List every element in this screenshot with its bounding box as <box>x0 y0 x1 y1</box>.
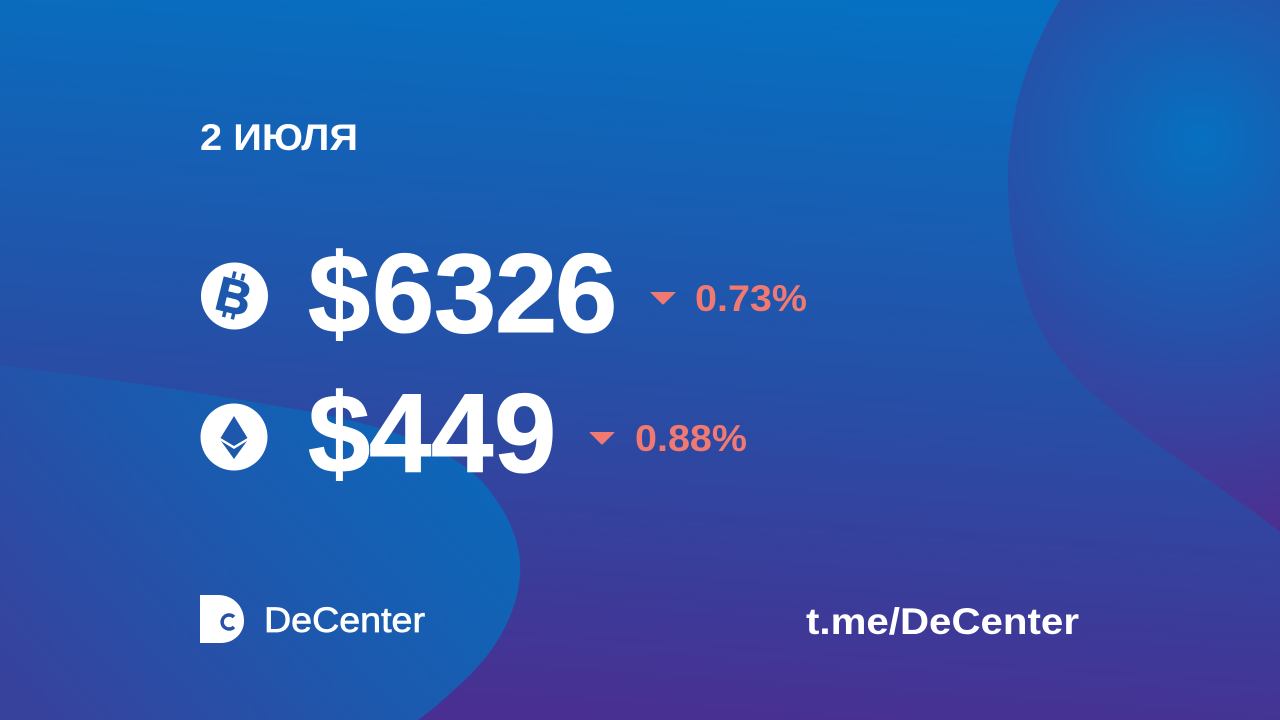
channel link: t.me/DeCenter <box>806 601 1079 642</box>
brand name: DeCenter <box>264 601 425 640</box>
blob: bottom left <box>0 365 520 720</box>
arrow: ethereum down <box>590 432 614 444</box>
bitcoin row <box>201 231 807 356</box>
icon: bitcoin <box>201 262 268 330</box>
ethereum price: $449 <box>308 371 556 496</box>
date heading: 2 ИЮЛЯ <box>200 117 358 158</box>
arrow: bitcoin down <box>650 292 676 304</box>
icon: bitcoin: B <box>210 268 257 327</box>
icon: DeCenter D mark <box>200 595 244 643</box>
blob: right <box>1008 0 1280 532</box>
bitcoin price: $6326 <box>308 231 617 356</box>
ethereum row <box>200 371 747 496</box>
icon: ethereum <box>200 404 268 470</box>
ethereum change: 0.88% <box>635 418 747 459</box>
bitcoin change: 0.73% <box>695 278 807 319</box>
logo: DeCenter <box>200 595 425 643</box>
